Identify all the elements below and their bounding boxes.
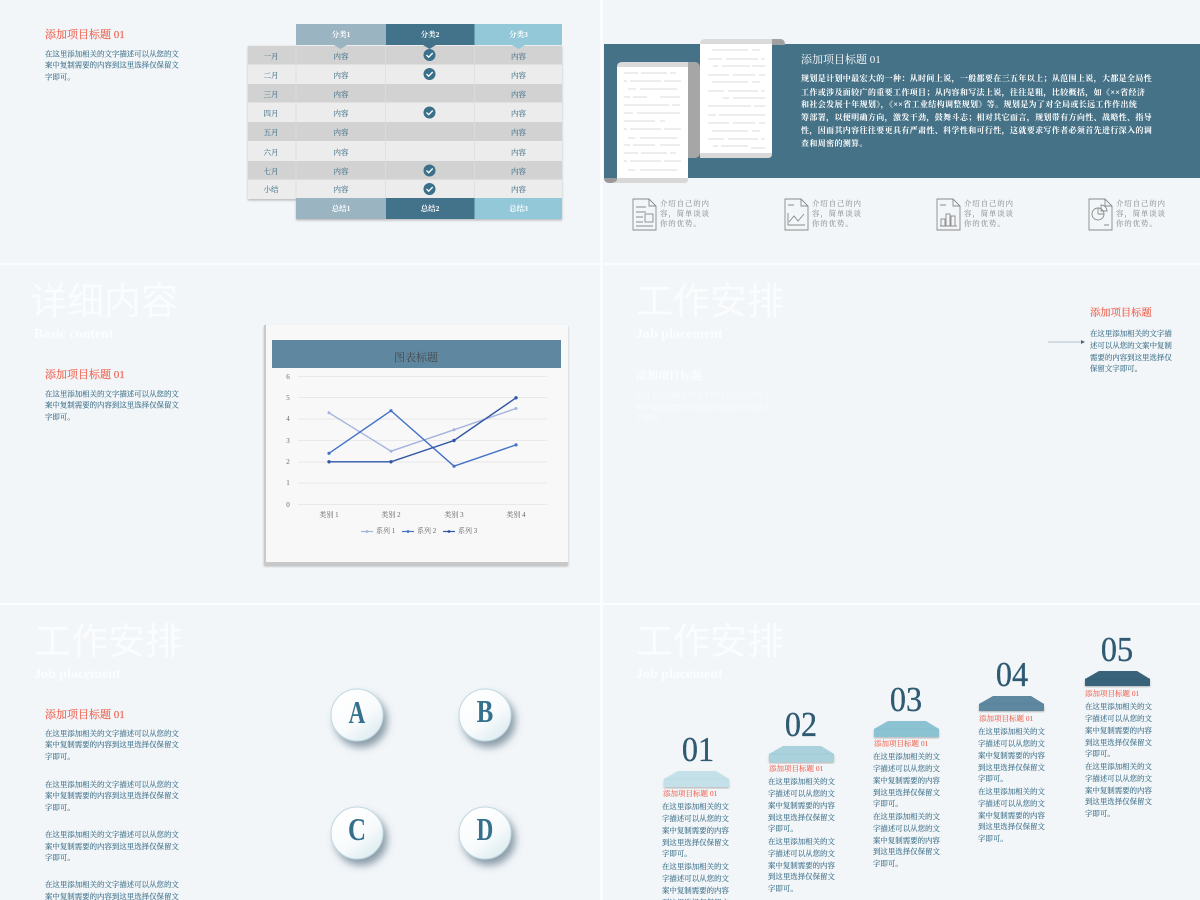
chart title band: 图表标题	[394, 350, 438, 364]
table column 3 cells: 内容	[511, 166, 526, 176]
table row labels: 二月	[264, 71, 278, 80]
chart legend: 系列 1	[376, 526, 396, 535]
table header row: 分类3	[509, 29, 528, 39]
step 03: 到这里选择仅保留文	[873, 787, 940, 797]
title: chart slide: 详细内容	[30, 281, 178, 322]
circle B: B	[477, 694, 493, 730]
table column 1 cells: 内容	[334, 51, 349, 61]
text block: paragraph 1	[45, 728, 179, 761]
panel: four circles slide	[0, 605, 600, 900]
y axis labels: 0	[286, 501, 290, 509]
step 02: 到这里选择仅保留文	[768, 812, 835, 822]
text block: feature 3: 你的优势。	[964, 218, 1006, 228]
text block: feature 3	[964, 198, 1014, 228]
step 03: 字描述可以从您的文	[873, 823, 940, 833]
step 03: 字描述可以从您的文	[873, 763, 940, 773]
circle D: D	[477, 812, 493, 848]
text block: feature 1: 容，简单谈谈	[660, 208, 710, 219]
icon: left document	[604, 62, 700, 183]
faint text block	[636, 390, 770, 423]
step 03: 添加项目标题 01	[874, 738, 929, 748]
step 01: 01	[682, 731, 714, 769]
step 05: 添加项目标题 01	[1085, 688, 1140, 698]
table column 1 cells	[334, 51, 349, 194]
circle C: C	[348, 812, 366, 848]
step 02: 案中复制需要的内容	[768, 800, 835, 810]
text block: paragraph 4: 在这里添加相关的文字描述可以从您的文	[45, 879, 179, 889]
step 02: 在这里添加相关的文	[768, 836, 835, 846]
text block: feature 3: 介绍自己的内	[964, 198, 1014, 208]
step 05: 字即可。	[1085, 808, 1115, 818]
step 05	[1085, 631, 1152, 818]
step 05: 案中复制需要的内容	[1085, 725, 1152, 735]
text block: feature 1: 你的优势。	[660, 218, 702, 228]
step 01: 在这里添加相关的文	[662, 801, 729, 811]
step 04: 到这里选择仅保留文	[978, 821, 1045, 831]
faint text block: 字即可。	[636, 413, 666, 423]
y axis labels: 6	[286, 373, 290, 381]
y axis labels: 1	[286, 479, 290, 487]
table row labels	[264, 52, 279, 194]
text block: banner paragraph: 查和周密的测算。	[801, 138, 868, 148]
circle A: A	[349, 695, 365, 731]
line chart card	[264, 325, 568, 565]
faint text block: 在这里添加相关的文字描述可以从您的文	[636, 390, 770, 400]
text block: chart slide description: 在这里添加相关的文字描述可以从您的文	[45, 388, 179, 398]
step 02: 02	[785, 706, 817, 744]
table column 1 cells: 内容	[334, 70, 349, 80]
text block: feature 2	[812, 198, 862, 228]
icon: line chart page	[785, 199, 808, 230]
text block: paragraph 1: 在这里添加相关的文字描述可以从您的文	[45, 728, 179, 738]
step 04: 到这里选择仅保留文	[978, 762, 1045, 772]
text block: table slide description: 字即可。	[45, 72, 75, 82]
text block: feature 4: 容，简单谈谈	[1116, 208, 1166, 219]
text block: feature 3: 容，简单谈谈	[964, 208, 1014, 219]
text block: table slide description: 在这里添加相关的文字描述可以从您的文	[45, 48, 179, 58]
x axis labels: 类别 3	[444, 510, 464, 519]
step 02: 字描述可以从您的文	[768, 788, 835, 798]
heading: circles slide: 添加项目标题 01	[45, 707, 125, 721]
chart legend: 系列 2	[417, 526, 437, 535]
text block: callout: 述可以从您的文案中复制	[1090, 340, 1172, 350]
text block: paragraph 2: 在这里添加相关的文字描述可以从您的文	[45, 779, 179, 789]
table row labels: 一月	[264, 52, 278, 61]
step 05: 在这里添加相关的文	[1085, 701, 1152, 711]
panel: five steps slide	[603, 605, 1200, 900]
title: circles slide: 工作安排	[34, 621, 182, 662]
chart legend	[361, 526, 478, 535]
step 03: 字即可。	[873, 798, 903, 808]
text block: banner paragraph: 性，因而其内容往往要更具有严肃性、科学性和可行性，这就要求写作者必须首先进行深入的调	[801, 125, 1152, 136]
text block: paragraph 1: 案中复制需要的内容到这里选择仅保留文	[45, 739, 179, 749]
text block: callout: 在这里添加相关的文字描	[1090, 328, 1172, 338]
table column 3 cells: 内容	[511, 70, 526, 80]
panel: callout slide	[603, 265, 1200, 603]
step 05: 字描述可以从您的文	[1085, 713, 1152, 723]
step 01: 在这里添加相关的文	[662, 861, 729, 871]
faint text block: 案中复制需要的内容到这里选择仅保留文	[636, 402, 770, 412]
step 04: 在这里添加相关的文	[978, 726, 1045, 736]
title: steps slide: 工作安排	[636, 621, 784, 662]
step 03: 在这里添加相关的文	[873, 811, 940, 821]
y axis labels: 5	[286, 394, 290, 402]
text block: table slide description: 案中复制需要的内容到这里选择仅保留文	[45, 60, 179, 70]
title: callout slide: 工作安排	[636, 281, 784, 322]
series 1 line	[328, 407, 518, 453]
step 04: 案中复制需要的内容	[978, 810, 1045, 820]
text block: callout: 保留文字即可。	[1090, 363, 1142, 373]
panel: planning description slide	[603, 0, 1200, 263]
y axis labels	[286, 373, 290, 509]
step 04	[978, 656, 1045, 843]
step 03: 在这里添加相关的文	[873, 751, 940, 761]
chart legend: 系列 3	[458, 526, 478, 535]
table column 3 cells: 内容	[511, 108, 526, 118]
chart title band	[272, 340, 561, 368]
table column 1 cells: 内容	[334, 166, 349, 176]
step 05: 05	[1101, 631, 1133, 669]
step 01: 字描述可以从您的文	[662, 873, 729, 883]
subtitle: circles slide: Job placement	[34, 667, 121, 682]
step 01: 案中复制需要的内容	[662, 885, 729, 895]
step 05: 字即可。	[1085, 748, 1115, 758]
table: monthly plan	[248, 24, 562, 219]
text block: chart slide description: 字即可。	[45, 412, 75, 422]
step 04: 04	[996, 656, 1028, 694]
step 04: 在这里添加相关的文	[978, 786, 1045, 796]
x axis labels	[319, 510, 526, 519]
table column 3 cells: 内容	[511, 51, 526, 61]
y axis labels: 4	[286, 415, 290, 423]
text block: feature 4: 介绍自己的内	[1116, 198, 1166, 208]
table column 3 cells: 内容	[511, 127, 526, 137]
table column 1 cells: 内容	[334, 108, 349, 118]
step 01: 字即可。	[662, 848, 692, 858]
text block: feature 2: 你的优势。	[812, 218, 854, 228]
table column 3 cells: 内容	[511, 184, 526, 194]
step 01: 添加项目标题 01	[663, 788, 718, 798]
step 05: 字描述可以从您的文	[1085, 773, 1152, 783]
subtitle: callout slide: Job placement	[636, 327, 723, 342]
table footer row	[296, 198, 562, 219]
step 01: 字描述可以从您的文	[662, 813, 729, 823]
circle A	[331, 689, 383, 741]
x axis labels: 类别 4	[506, 510, 526, 519]
table row labels: 六月	[264, 147, 278, 157]
step 02: 字即可。	[768, 823, 798, 833]
text block: feature 1: 介绍自己的内	[660, 198, 710, 208]
x axis labels: 类别 1	[319, 510, 339, 519]
table row labels: 七月	[264, 166, 278, 176]
text block: paragraph 3	[45, 829, 179, 862]
step 01	[662, 731, 729, 900]
text block: chart slide description	[45, 388, 179, 422]
table column 1 cells: 内容	[334, 184, 349, 194]
step 05: 在这里添加相关的文	[1085, 761, 1152, 771]
series 3 line	[327, 396, 518, 463]
step 01: 到这里选择仅保留文	[662, 837, 729, 847]
step 04: 案中复制需要的内容	[978, 750, 1045, 760]
faint heading: 添加项目标题	[636, 368, 702, 382]
step 02: 字即可。	[768, 883, 798, 893]
text block: banner paragraph: 工作或涉及面较广的重要工作项目；从内容和写法上说，往往是粗，比较概括，如《××省经济	[801, 87, 1145, 98]
step 05: 到这里选择仅保留文	[1085, 737, 1152, 747]
table column 3 cells: 内容	[511, 89, 526, 99]
step 02: 案中复制需要的内容	[768, 860, 835, 870]
text block: banner paragraph: 筹部署，以便明确方向，激发干劲，鼓舞斗志；相对其它而言，规划带有方向性、战略性、指导	[801, 112, 1152, 123]
step 03: 到这里选择仅保留文	[873, 846, 940, 856]
subtitle: chart slide: Basic content	[34, 327, 114, 342]
subtitle: steps slide: Job placement	[636, 667, 723, 682]
table footer row: 总结1	[332, 203, 351, 213]
step 02: 添加项目标题 01	[769, 763, 824, 773]
table header row	[296, 24, 562, 49]
panel: chart slide	[0, 265, 600, 603]
x axis labels: 类别 2	[381, 510, 401, 519]
circle B	[459, 689, 511, 741]
text block: feature 1	[660, 198, 710, 228]
step 02: 到这里选择仅保留文	[768, 871, 835, 881]
step 04: 字即可。	[978, 833, 1008, 843]
series 2 line	[327, 409, 518, 468]
step 04: 添加项目标题 01	[979, 713, 1034, 723]
step 03: 案中复制需要的内容	[873, 775, 940, 785]
table row labels: 小结	[264, 184, 279, 194]
heading: table slide: 添加项目标题 01	[45, 27, 125, 41]
step 04: 字描述可以从您的文	[978, 798, 1045, 808]
text block: feature 4: 你的优势。	[1116, 218, 1158, 228]
text block: callout	[1090, 328, 1172, 373]
text block: paragraph 3: 案中复制需要的内容到这里选择仅保留文	[45, 841, 179, 851]
text block: paragraph 2	[45, 779, 179, 812]
text block: banner paragraph: 和社会发展十年规划》，《××省工业结构调整规划》等。规划是为了对全局或长远工作作出统	[801, 99, 1138, 110]
table row labels: 四月	[264, 109, 278, 118]
text block: callout: 需要的内容到这里选择仅	[1090, 352, 1172, 362]
arrow	[1048, 340, 1085, 344]
text block: banner paragraph	[801, 73, 1152, 148]
panel: schedule table slide	[0, 0, 600, 263]
text block: table slide description	[45, 48, 179, 82]
table header row: 分类1	[332, 29, 351, 39]
text block: feature 2: 容，简单谈谈	[812, 208, 862, 219]
table row labels: 三月	[264, 90, 278, 99]
step 03: 字即可。	[873, 858, 903, 868]
text block: paragraph 1: 字即可。	[45, 751, 75, 761]
table footer row: 总结3	[509, 203, 528, 213]
step 03: 03	[890, 681, 922, 719]
circle D	[459, 807, 511, 859]
text block: paragraph 3: 在这里添加相关的文字描述可以从您的文	[45, 829, 179, 839]
heading: chart slide: 添加项目标题 01	[45, 367, 125, 381]
table column 1 cells: 内容	[334, 89, 349, 99]
table column 3 cells: 内容	[511, 147, 526, 157]
text block: feature 4	[1116, 198, 1166, 228]
table column 2 check icons	[424, 49, 436, 195]
table column 3 cells	[511, 51, 526, 194]
step 02: 字描述可以从您的文	[768, 848, 835, 858]
step 02: 在这里添加相关的文	[768, 776, 835, 786]
text block: paragraph 2: 字即可。	[45, 802, 75, 812]
table column 1 cells: 内容	[334, 147, 349, 157]
step 04: 字即可。	[978, 773, 1008, 783]
text block: banner paragraph: 规划是计划中最宏大的一种：从时间上说，一般都要在三五年以上；从范围上说，大都是全局性	[801, 73, 1152, 84]
table column 1 cells: 内容	[334, 127, 349, 137]
text block: feature 2: 介绍自己的内	[812, 198, 862, 208]
step 05: 案中复制需要的内容	[1085, 785, 1152, 795]
text block: paragraph 3: 字即可。	[45, 852, 75, 862]
icon: right document	[700, 39, 785, 158]
y axis labels: 3	[286, 437, 290, 445]
circle C	[331, 807, 383, 859]
step 04: 字描述可以从您的文	[978, 738, 1045, 748]
step 03	[873, 681, 940, 868]
heading: callout: 添加项目标题	[1090, 306, 1152, 319]
text block: paragraph 4	[45, 879, 179, 900]
table footer row: 总结2	[421, 203, 440, 213]
text block: paragraph 2: 案中复制需要的内容到这里选择仅保留文	[45, 790, 179, 800]
text block: chart slide description: 案中复制需要的内容到这里选择仅保留文	[45, 400, 179, 410]
step 03: 案中复制需要的内容	[873, 835, 940, 845]
icon: bar chart page	[937, 199, 960, 230]
banner	[604, 44, 1200, 178]
heading: banner title: 添加项目标题 01	[801, 52, 881, 66]
step 01: 案中复制需要的内容	[662, 825, 729, 835]
step 05: 到这里选择仅保留文	[1085, 796, 1152, 806]
y axis labels: 2	[286, 458, 290, 466]
icon: document page	[633, 199, 656, 230]
table row labels: 五月	[264, 128, 278, 137]
icon: pie chart page	[1089, 199, 1112, 230]
table header row: 分类2	[421, 29, 440, 39]
step 02	[768, 706, 835, 893]
